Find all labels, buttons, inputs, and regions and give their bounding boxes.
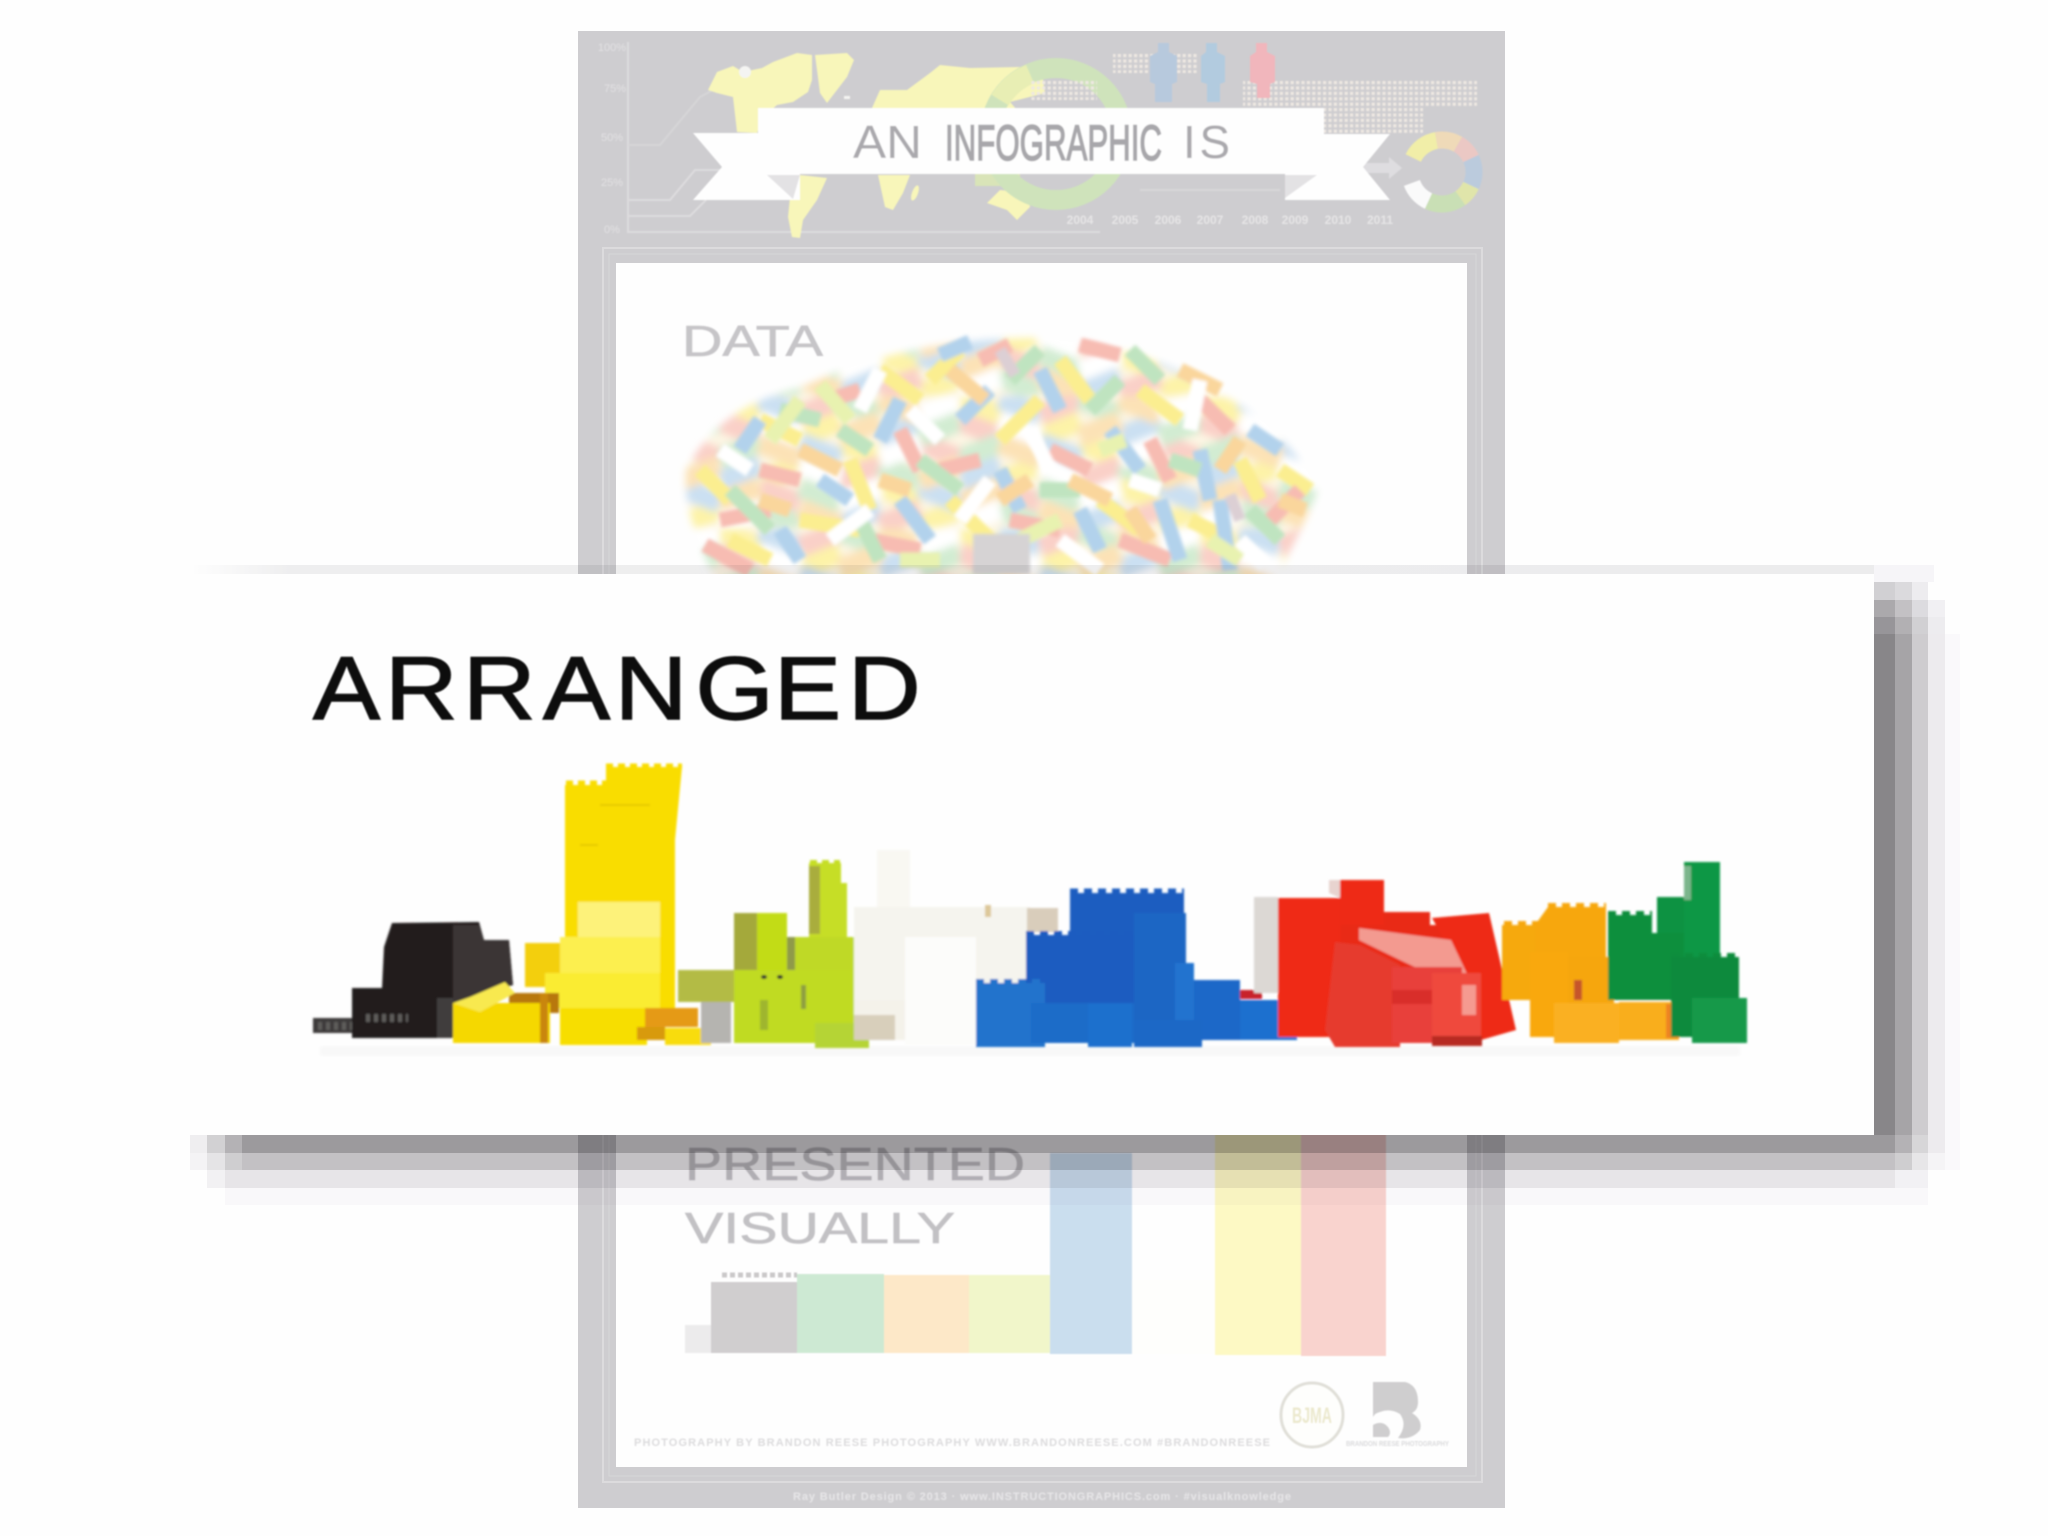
heading: arranged: ARRANGED xyxy=(313,639,921,739)
black bricks xyxy=(313,922,513,1038)
axis labels: 50% xyxy=(601,132,623,144)
year labels: 2006 xyxy=(1155,213,1182,227)
white bricks xyxy=(854,850,1058,1045)
banner title xyxy=(853,115,1230,171)
lime bricks xyxy=(678,862,869,1048)
inner frame xyxy=(603,248,1482,1482)
year labels: 2010 xyxy=(1325,213,1352,227)
brand logo xyxy=(1346,1382,1449,1448)
axis labels: 100% xyxy=(598,42,626,54)
sorted lego bricks xyxy=(313,766,1747,1048)
year labels: 2004 xyxy=(1067,213,1094,227)
axis labels: 0% xyxy=(604,224,620,236)
year labels: 2008 xyxy=(1242,213,1269,227)
year labels: 2005 xyxy=(1112,213,1139,227)
header graphic xyxy=(598,42,1487,238)
heading: data: DATA xyxy=(682,317,824,366)
blue bricks xyxy=(976,891,1297,1047)
panel: arranged xyxy=(184,574,1874,1135)
lego pile xyxy=(686,338,1318,590)
arrow xyxy=(1363,157,1402,179)
heading: presented visually xyxy=(685,1138,1025,1253)
year labels xyxy=(1067,213,1393,227)
panel drop shadow xyxy=(190,565,1960,1205)
orange bricks xyxy=(1502,905,1679,1043)
heading: presented visually: PRESENTED xyxy=(685,1138,1025,1190)
dot map xyxy=(1030,53,1477,133)
axis labels: 25% xyxy=(601,177,623,189)
shadow bands: right side xyxy=(1874,565,1960,1170)
year labels: 2007 xyxy=(1197,213,1224,227)
green bricks xyxy=(1608,862,1747,1043)
banner title: INFOGRAPHIC xyxy=(945,115,1162,171)
red bricks xyxy=(1254,880,1516,1047)
yellow bricks xyxy=(453,766,711,1045)
ground shadow xyxy=(320,1046,1740,1056)
green ring xyxy=(990,68,1122,200)
axis chart lines xyxy=(628,42,1280,232)
people figures xyxy=(1150,43,1275,102)
sorted brick bar chart xyxy=(685,1120,1386,1356)
year labels: 2011 xyxy=(1367,213,1393,227)
brand logo: BRANDON REESE PHOTOGRAPHY xyxy=(1346,1441,1449,1448)
heading: presented visually: VISUALLY xyxy=(685,1204,955,1253)
background poster xyxy=(578,31,1505,1508)
banner title: AN xyxy=(853,116,922,168)
axis labels xyxy=(598,42,626,236)
ribbon banner xyxy=(693,108,1390,200)
photo credit: PHOTOGRAPHY BY BRANDON REESE PHOTOGRAPHY WWW.BRANDONREESE.COM #BRANDONREESE xyxy=(634,1437,1270,1449)
year labels: 2009 xyxy=(1282,213,1309,227)
seal logo xyxy=(1281,1383,1343,1447)
shadow bands: bottom xyxy=(190,1135,1945,1205)
seal logo: BJMA xyxy=(1292,1403,1332,1428)
axis labels: 75% xyxy=(604,83,626,95)
donut chart xyxy=(1397,127,1487,217)
world map xyxy=(708,53,1045,238)
banner title: IS xyxy=(1183,116,1230,168)
footer credit: Ray Butler Design © 2013 · www.INSTRUCTIONGRAPHICS.com · #visualknowledge xyxy=(793,1491,1291,1503)
